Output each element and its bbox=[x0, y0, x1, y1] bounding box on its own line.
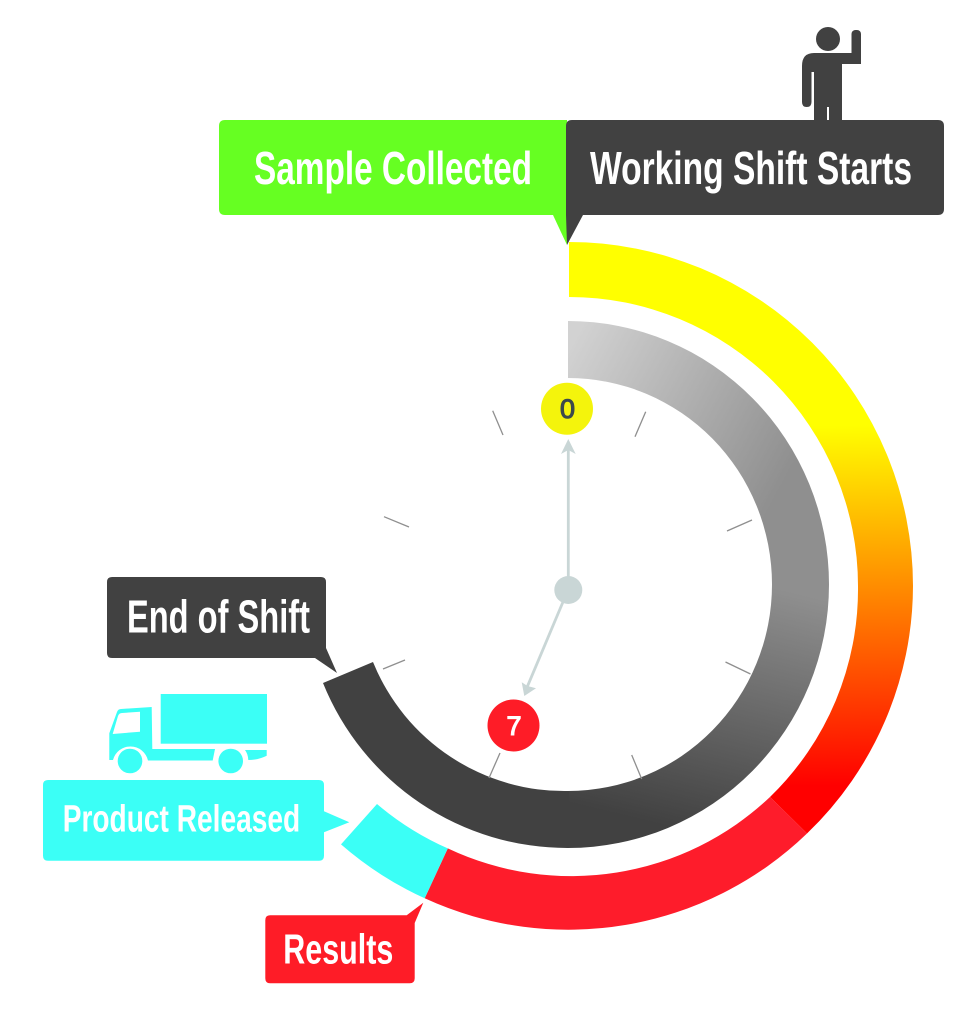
badge: 0: 0 bbox=[560, 394, 575, 424]
icon: person waving bbox=[802, 27, 861, 122]
callout: product released: Product Released bbox=[63, 799, 300, 841]
clock hand: down to seven bbox=[522, 590, 568, 696]
badge: 0 bbox=[541, 383, 593, 435]
inner ring: dark end of shift segment bbox=[323, 662, 569, 848]
clock centre dot bbox=[554, 576, 582, 604]
badge: 7: 7 bbox=[506, 711, 522, 741]
callout: sample collected: Sample Collected bbox=[254, 142, 532, 194]
callout: sample collected bbox=[219, 120, 567, 245]
icon: delivery truck bbox=[109, 694, 267, 773]
inner ring: gray upper gradient segment bbox=[568, 321, 829, 585]
callout: product released bbox=[43, 780, 349, 861]
outer ring: yellow to red gradient segment bbox=[569, 242, 913, 834]
callout: results: Results bbox=[283, 925, 393, 972]
clock tick marks bbox=[383, 411, 752, 779]
outer ring: cyan product released segment bbox=[341, 804, 448, 898]
badge: 7 bbox=[488, 700, 540, 752]
outer ring: red results segment bbox=[425, 797, 807, 930]
inner ring: gray lower gradient segment bbox=[568, 584, 829, 848]
callout: working shift starts bbox=[566, 120, 944, 245]
callout: results bbox=[265, 903, 423, 983]
callout: end of shift bbox=[107, 577, 337, 673]
clock hand: up to zero bbox=[561, 439, 576, 590]
callout: end of shift: End of Shift bbox=[127, 590, 310, 642]
